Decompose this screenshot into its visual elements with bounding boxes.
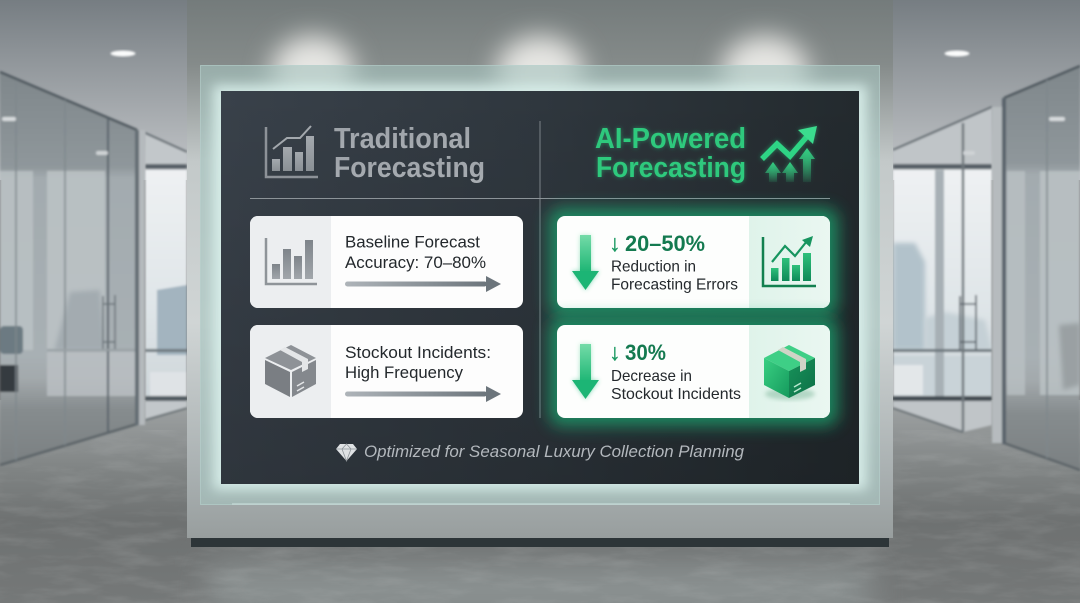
card glow [549,208,838,316]
footer text: Optimized for Seasonal Luxury Collection Planning [364,442,745,461]
icon: diamond [336,444,357,461]
card text: Accuracy: 70–80% [345,254,486,272]
icon: bar chart [266,238,317,284]
floor [0,400,1080,603]
card text [611,368,741,403]
card text [611,258,738,294]
metric: 30%: 30% [625,340,666,365]
card text: Stockout Incidents [611,386,741,403]
header rule [250,198,830,200]
floor texture [0,430,1080,603]
icon: traditional chart [266,126,318,177]
card text: High Frequency [345,364,464,382]
left glass wall [0,72,145,465]
card text [345,344,491,382]
flat arrow [345,276,501,292]
metric: 20–50%: ↓ [609,230,620,256]
right window [893,107,992,432]
card: stockout decrease [549,317,838,426]
ceiling light right [944,50,970,56]
icon: green box [764,345,815,400]
icon: big down arrow [572,344,599,399]
center divider [539,121,541,418]
heading: traditional forecasting: Traditional [334,123,471,155]
card glow [549,317,838,426]
card: stockout incidents [250,325,523,418]
metric: 20–50%: 20–50% [625,231,705,256]
heading: AI-powered forecasting: AI-Powered [595,123,746,155]
card background [557,325,830,418]
card text: Forecasting Errors [611,276,738,294]
display wall [187,0,893,547]
ceiling [0,0,1080,180]
card background [557,216,830,308]
card text: Baseline Forecast [345,234,480,252]
icon: green chart [763,236,816,286]
card icon area [250,325,331,418]
icon: grey box [265,345,316,397]
card background [250,216,523,308]
heading: AI-powered forecasting [595,123,746,184]
metric: 30%: ↓ [609,339,620,365]
right glass wall [963,66,1080,470]
footer note [336,442,745,461]
card text: Stockout Incidents: [345,344,491,362]
card text [345,234,486,272]
main dark panel [221,91,859,484]
card text: Decrease in [611,368,692,385]
frame lower highlight [232,504,850,505]
heading: traditional forecasting [334,123,485,184]
heading: AI-powered forecasting: Forecasting [596,152,746,184]
metric: 30% [609,339,666,365]
flat arrow [345,386,501,402]
spotlights [271,36,809,112]
icon: big down arrow [572,235,599,290]
card icon area [749,325,830,418]
card: forecasting error reduction [549,208,838,316]
card icon area [250,216,331,308]
panel background [221,91,859,484]
floor sheen under the wall [210,565,870,603]
glass frame [200,66,880,504]
base skirting [191,538,889,547]
card: baseline forecast accuracy [250,216,523,308]
frame glow [213,85,867,490]
icon: AI growth arrows [762,126,817,182]
card text: Reduction in [611,258,696,276]
card icon area [749,216,830,308]
wall surface [187,0,893,538]
heading: traditional forecasting: Forecasting [334,152,485,184]
ceiling light left [110,50,136,56]
left window [145,133,187,420]
card background [250,325,523,418]
